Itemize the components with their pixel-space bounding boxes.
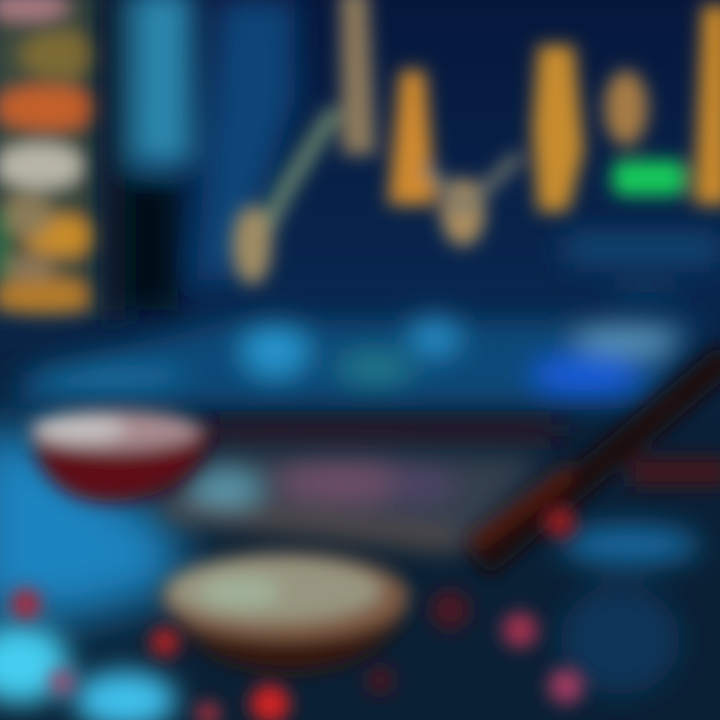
panel: blue columns — [100, 0, 295, 320]
icon: chopsticks diagonal — [470, 355, 720, 565]
candle: orange tall — [388, 70, 436, 205]
candle: low tan — [441, 178, 485, 246]
candle: right edge — [694, 5, 720, 205]
icon: beige bowl — [161, 552, 409, 672]
panel: lower left blue glow — [0, 430, 180, 620]
icon: red bowl — [30, 410, 212, 502]
connector line — [425, 155, 520, 210]
decorative red dots — [11, 506, 584, 720]
panel: right ghost labels — [565, 235, 720, 300]
panel: center plate — [160, 450, 545, 545]
panel: bottom cyan glow — [0, 525, 700, 720]
green marker — [612, 160, 686, 196]
trend line: rising — [232, 110, 335, 285]
panel: left data column — [0, 0, 100, 315]
chart: candlestick trend — [232, 0, 720, 285]
panel: dark red tabletop strip — [210, 420, 560, 440]
candle: tan peak — [340, 0, 376, 155]
candle: short orange — [604, 70, 648, 146]
candle: orange wide — [532, 45, 584, 212]
panel: glowing blue table band — [20, 315, 700, 405]
